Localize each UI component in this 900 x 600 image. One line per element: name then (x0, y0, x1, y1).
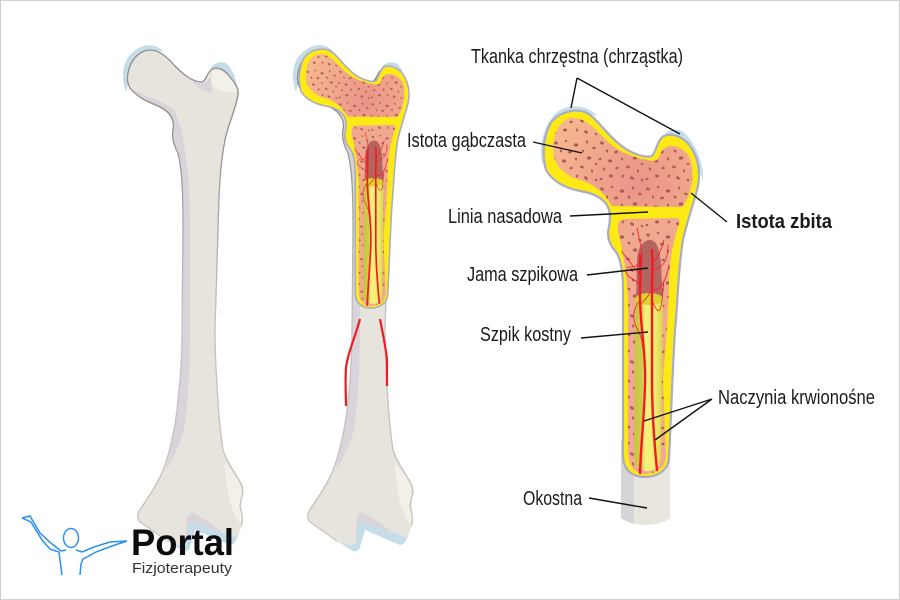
label: Istota zbita: Istota zbita (736, 211, 833, 233)
leader line: marrow (581, 332, 648, 338)
label: Linia nasadowa: Linia nasadowa (448, 206, 563, 228)
leader lines: blood vessels (644, 399, 712, 440)
leader line: spongy bone (533, 142, 582, 153)
label: Jama szpikowa: Jama szpikowa (467, 264, 579, 286)
leader line: medullary cavity (587, 268, 648, 275)
tagline: Fizjoterapeuty (132, 560, 233, 577)
label: Tkanka chrzestna: Tkanka chrzęstna (chrząstka) (471, 46, 683, 68)
leader line: compact bone (691, 193, 727, 222)
middle femur: bone base (293, 45, 413, 551)
icon: person with raised arms (22, 516, 127, 575)
leader line: periosteum (589, 498, 647, 508)
right femur: enlarged section with periosteum (541, 106, 703, 525)
wordmark: Portal (131, 522, 234, 563)
left femur: outer view (123, 45, 243, 551)
label: Okostna: Okostna (523, 488, 583, 510)
leader line: epiphyseal line (570, 212, 648, 216)
logo: Portal Fizjoterapeuty (22, 516, 234, 577)
label: Istota gabczasta: Istota gąbczasta (407, 130, 527, 152)
label: Szpik kostny: Szpik kostny (480, 324, 571, 346)
middle femur: cut blood vessels (346, 319, 387, 406)
middle femur: cross-section (299, 49, 409, 308)
leader lines: cartilage (571, 78, 680, 134)
